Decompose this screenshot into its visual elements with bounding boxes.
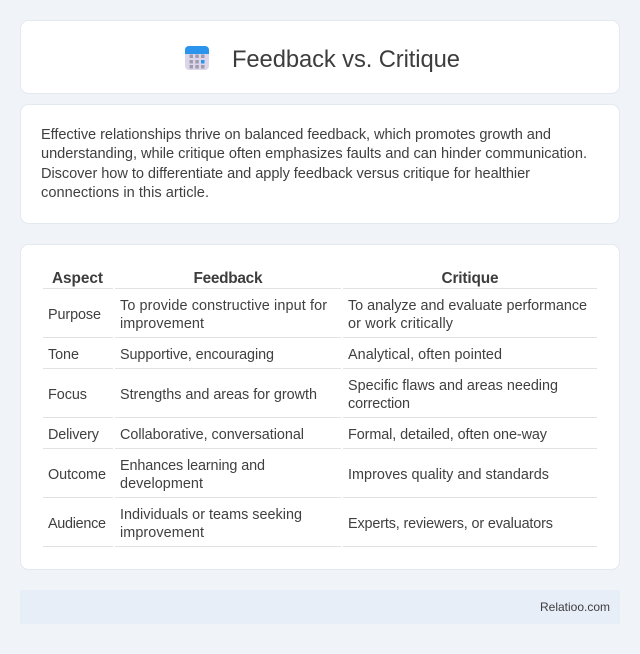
row: outcome: Enhances learning and — [120, 458, 265, 474]
row: tone — [48, 347, 502, 363]
row: focus: Focus — [48, 387, 87, 403]
intro text: understanding, while critique often emphasizes faults and can hinder communication. — [41, 146, 587, 162]
intro text: connections in this article. — [41, 185, 209, 201]
row: delivery — [48, 427, 548, 443]
row: tone: Tone — [48, 347, 79, 363]
footer: Relatioo.com — [540, 600, 610, 614]
row: purpose: Purpose — [48, 307, 101, 323]
panel: introduction — [20, 104, 620, 224]
row: purpose: improvement — [120, 316, 204, 332]
intro text: Discover how to differentiate and apply feedback versus critique for healthier — [41, 166, 530, 182]
row: audience: Audience — [48, 516, 106, 532]
row: purpose: or work critically — [348, 316, 454, 332]
row: focus: Specific flaws and areas needing — [348, 378, 558, 394]
row: tone: Supportive, encouraging — [120, 347, 274, 363]
footer — [20, 590, 620, 624]
table header: Feedback — [194, 270, 263, 287]
table header: Aspect — [52, 270, 103, 287]
title: Feedback vs. Critique — [232, 46, 460, 73]
intro text — [41, 127, 587, 201]
icon: calendar — [185, 46, 209, 70]
row: focus — [48, 378, 558, 412]
panel: comparison table — [20, 244, 620, 570]
row: delivery: Collaborative, conversational — [120, 427, 304, 443]
row: delivery: Delivery — [48, 427, 100, 443]
row: audience: Individuals or teams seeking — [120, 507, 302, 523]
row: audience: improvement — [120, 525, 204, 541]
row: outcome: development — [120, 476, 203, 492]
table header: Critique — [442, 270, 499, 287]
intro text: Effective relationships thrive on balanced feedback, which promotes growth and — [41, 127, 551, 143]
row: outcome: Improves quality and standards — [348, 467, 549, 483]
row: audience: Experts, reviewers, or evaluators — [348, 516, 553, 532]
row: focus: correction — [348, 396, 410, 412]
table header — [52, 270, 499, 287]
row: purpose: To provide constructive input for — [120, 298, 327, 314]
row: focus: Strengths and areas for growth — [120, 387, 317, 403]
row: purpose — [48, 298, 587, 332]
row: delivery: Formal, detailed, often one-way — [348, 427, 548, 443]
row: audience — [48, 507, 553, 541]
row: outcome: Outcome — [48, 467, 106, 483]
panel: title card — [20, 20, 620, 94]
row: outcome — [48, 458, 549, 492]
row: purpose: To analyze and evaluate performance — [348, 298, 587, 314]
row: tone: Analytical, often pointed — [348, 347, 502, 363]
